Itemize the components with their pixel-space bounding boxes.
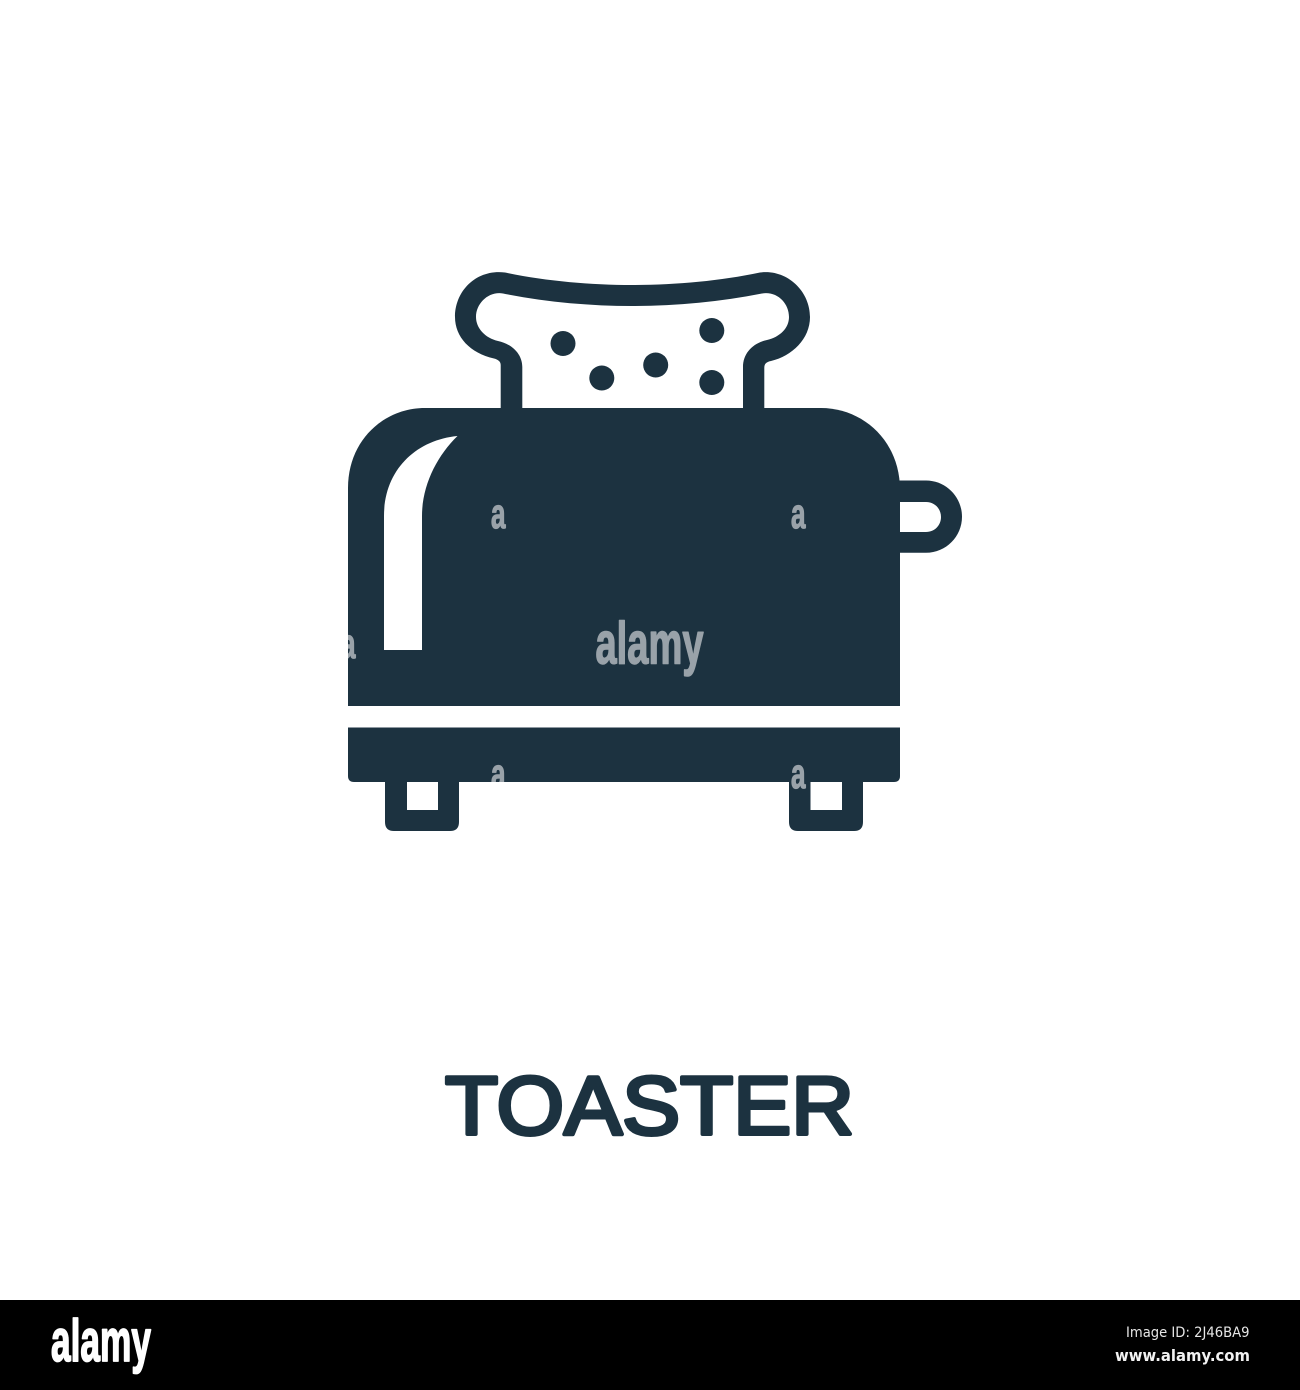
watermark: alamy letters: a (791, 750, 806, 797)
watermark: alamy letters: a (791, 490, 806, 537)
icon: toaster body (348, 408, 900, 706)
icon: toaster (348, 272, 962, 831)
icon: left foot (385, 778, 459, 831)
footer logo: alamy (51, 1308, 151, 1374)
icon: toaster base strip (348, 728, 900, 782)
icon: body highlight (384, 436, 458, 650)
website: www.alamy.com (1115, 1346, 1250, 1365)
toast holes (550, 318, 724, 395)
icon: toast slice (455, 272, 810, 412)
icon: toaster handle (895, 480, 962, 553)
footer bar (0, 1300, 1300, 1390)
watermark: alamy letters (341, 490, 806, 797)
watermark: alamy letters: a (491, 490, 506, 537)
watermark: alamy letters: a (341, 620, 356, 667)
icon: right foot (789, 778, 863, 831)
title: TOASTER (445, 1059, 854, 1152)
image id: Image ID: 2J46BA9 (1126, 1325, 1250, 1341)
watermark: alamy letters: a (491, 750, 506, 797)
watermark: alamy letters: alamy (596, 610, 704, 676)
